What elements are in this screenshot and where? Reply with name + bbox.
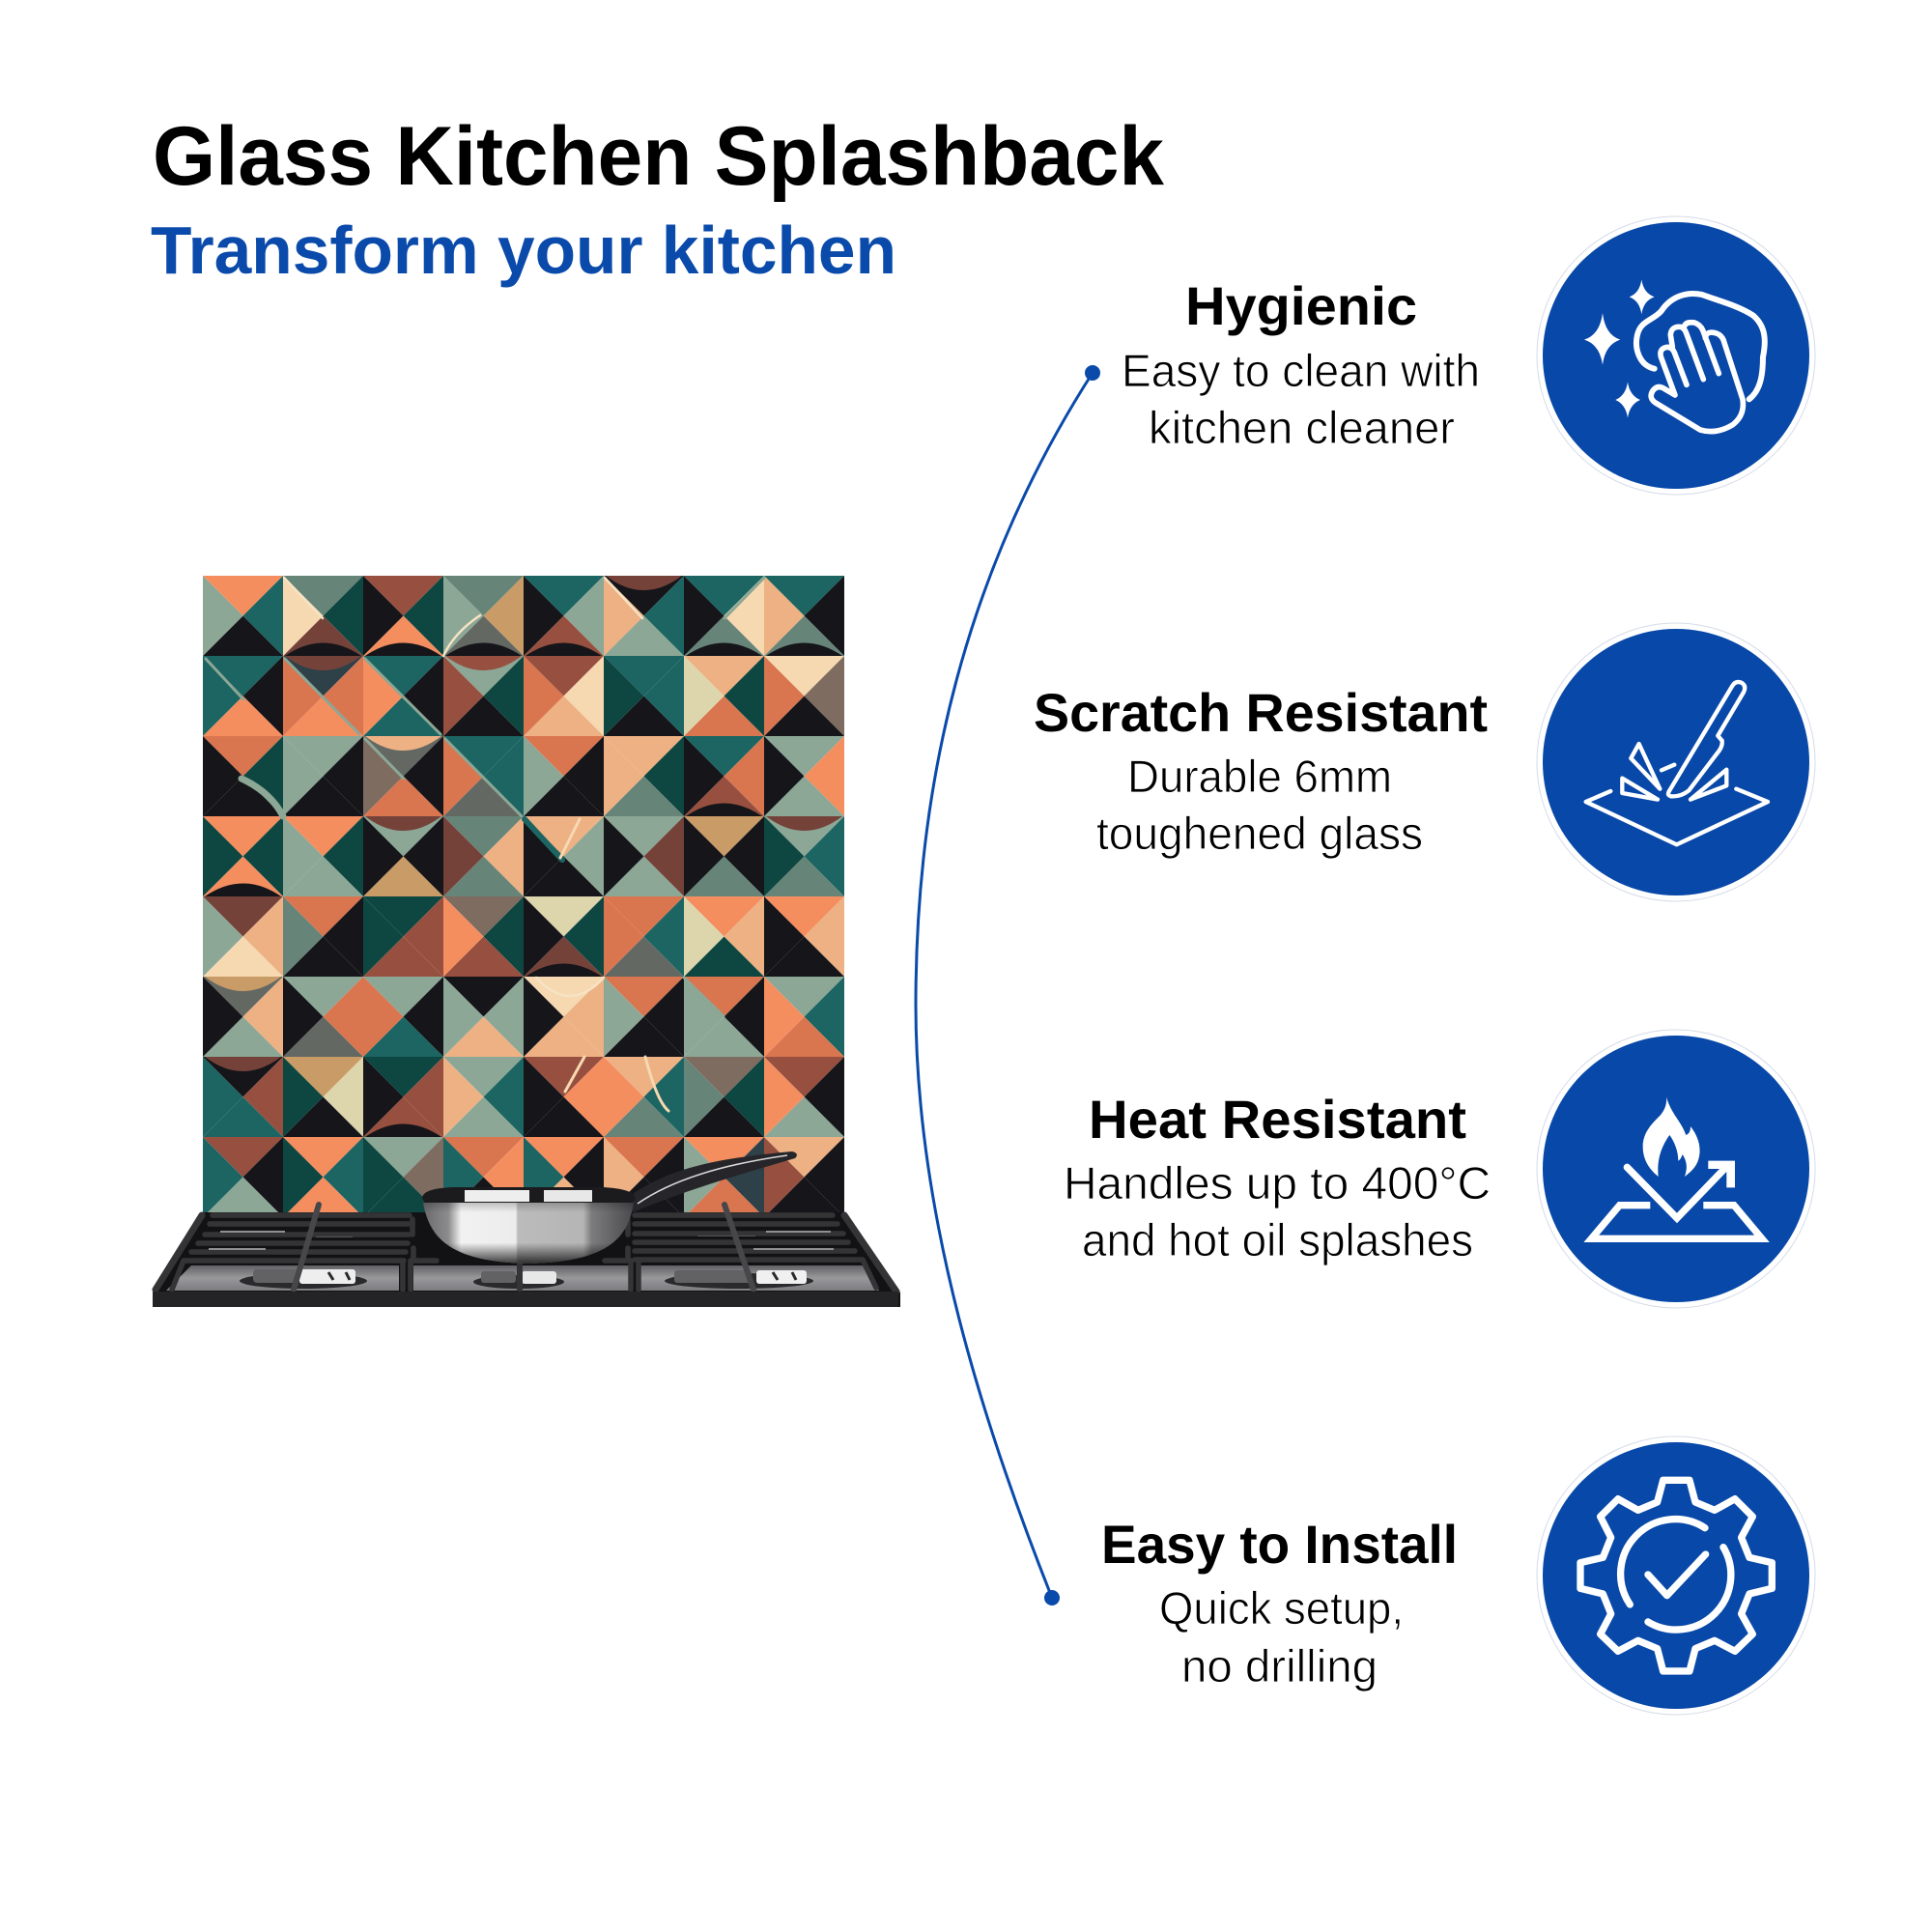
- title: Glass Kitchen Splashback: [153, 110, 1164, 203]
- splashback geometric tile pattern: [203, 576, 844, 1217]
- icon: gear with check mark: [1537, 1436, 1815, 1715]
- feature: heat resistant: and hot oil splashes: [1082, 1214, 1473, 1265]
- feature: hygienic: kitchen cleaner: [1149, 402, 1455, 453]
- feature: scratch resistant: Durable 6mm: [1127, 751, 1392, 802]
- feature: easy to install: Easy to Install: [1101, 1514, 1458, 1575]
- connector arc with end dots: [916, 365, 1100, 1605]
- icon: knife scratching glass: [1537, 623, 1815, 901]
- feature: hygienic: Easy to clean with: [1122, 345, 1480, 396]
- feature: heat resistant: [1064, 1089, 1491, 1265]
- feature: easy to install: Quick setup,: [1159, 1582, 1404, 1634]
- feature: hygienic: Hygienic: [1185, 275, 1417, 336]
- icon: hand wiping with sparkles: [1537, 216, 1815, 495]
- feature: easy to install: no drilling: [1181, 1640, 1378, 1691]
- feature: hygienic: [1122, 275, 1480, 453]
- gas hob with grates and burners: [153, 1205, 900, 1307]
- feature: scratch resistant: Scratch Resistant: [1034, 682, 1488, 743]
- feature: scratch resistant: toughened glass: [1096, 808, 1423, 859]
- subtitle: Transform your kitchen: [151, 213, 896, 288]
- frying pan: [422, 1151, 797, 1264]
- icon: flame with deflected arrow: [1537, 1030, 1815, 1308]
- feature: heat resistant: Heat Resistant: [1089, 1089, 1466, 1150]
- feature: easy to install: [1101, 1514, 1458, 1691]
- feature: scratch resistant: [1034, 682, 1488, 859]
- feature: heat resistant: Handles up to 400°C: [1064, 1157, 1491, 1208]
